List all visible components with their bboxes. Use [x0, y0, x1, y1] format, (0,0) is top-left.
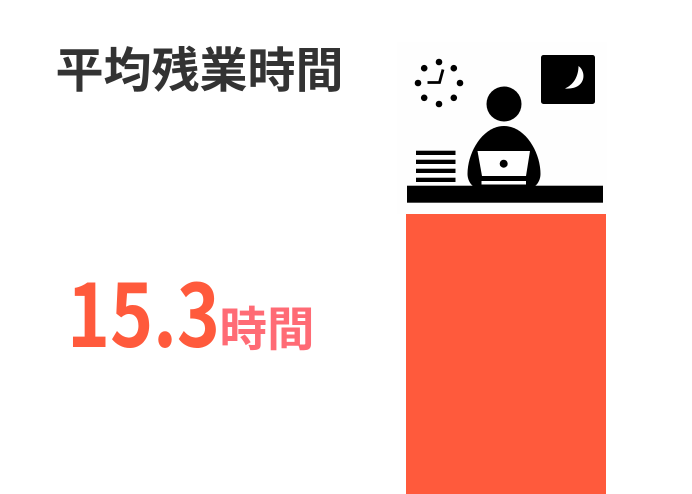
- icon: clock: [415, 59, 463, 107]
- icon: stack of papers: [416, 151, 456, 182]
- icon: night window with moon: [541, 55, 595, 104]
- title: 平均残業時間: [56, 31, 344, 101]
- value: 15.3 hours: [67, 247, 314, 373]
- value number: 15.3: [67, 247, 220, 373]
- icon: desk: [407, 186, 603, 203]
- value unit: 時間: [220, 291, 314, 360]
- icon: body: [468, 126, 540, 186]
- icon: head: [486, 86, 522, 122]
- icon: laptop: [478, 151, 530, 184]
- icon: person working late at a laptop: [397, 42, 607, 214]
- bar: [406, 214, 606, 494]
- icon background: [397, 42, 607, 214]
